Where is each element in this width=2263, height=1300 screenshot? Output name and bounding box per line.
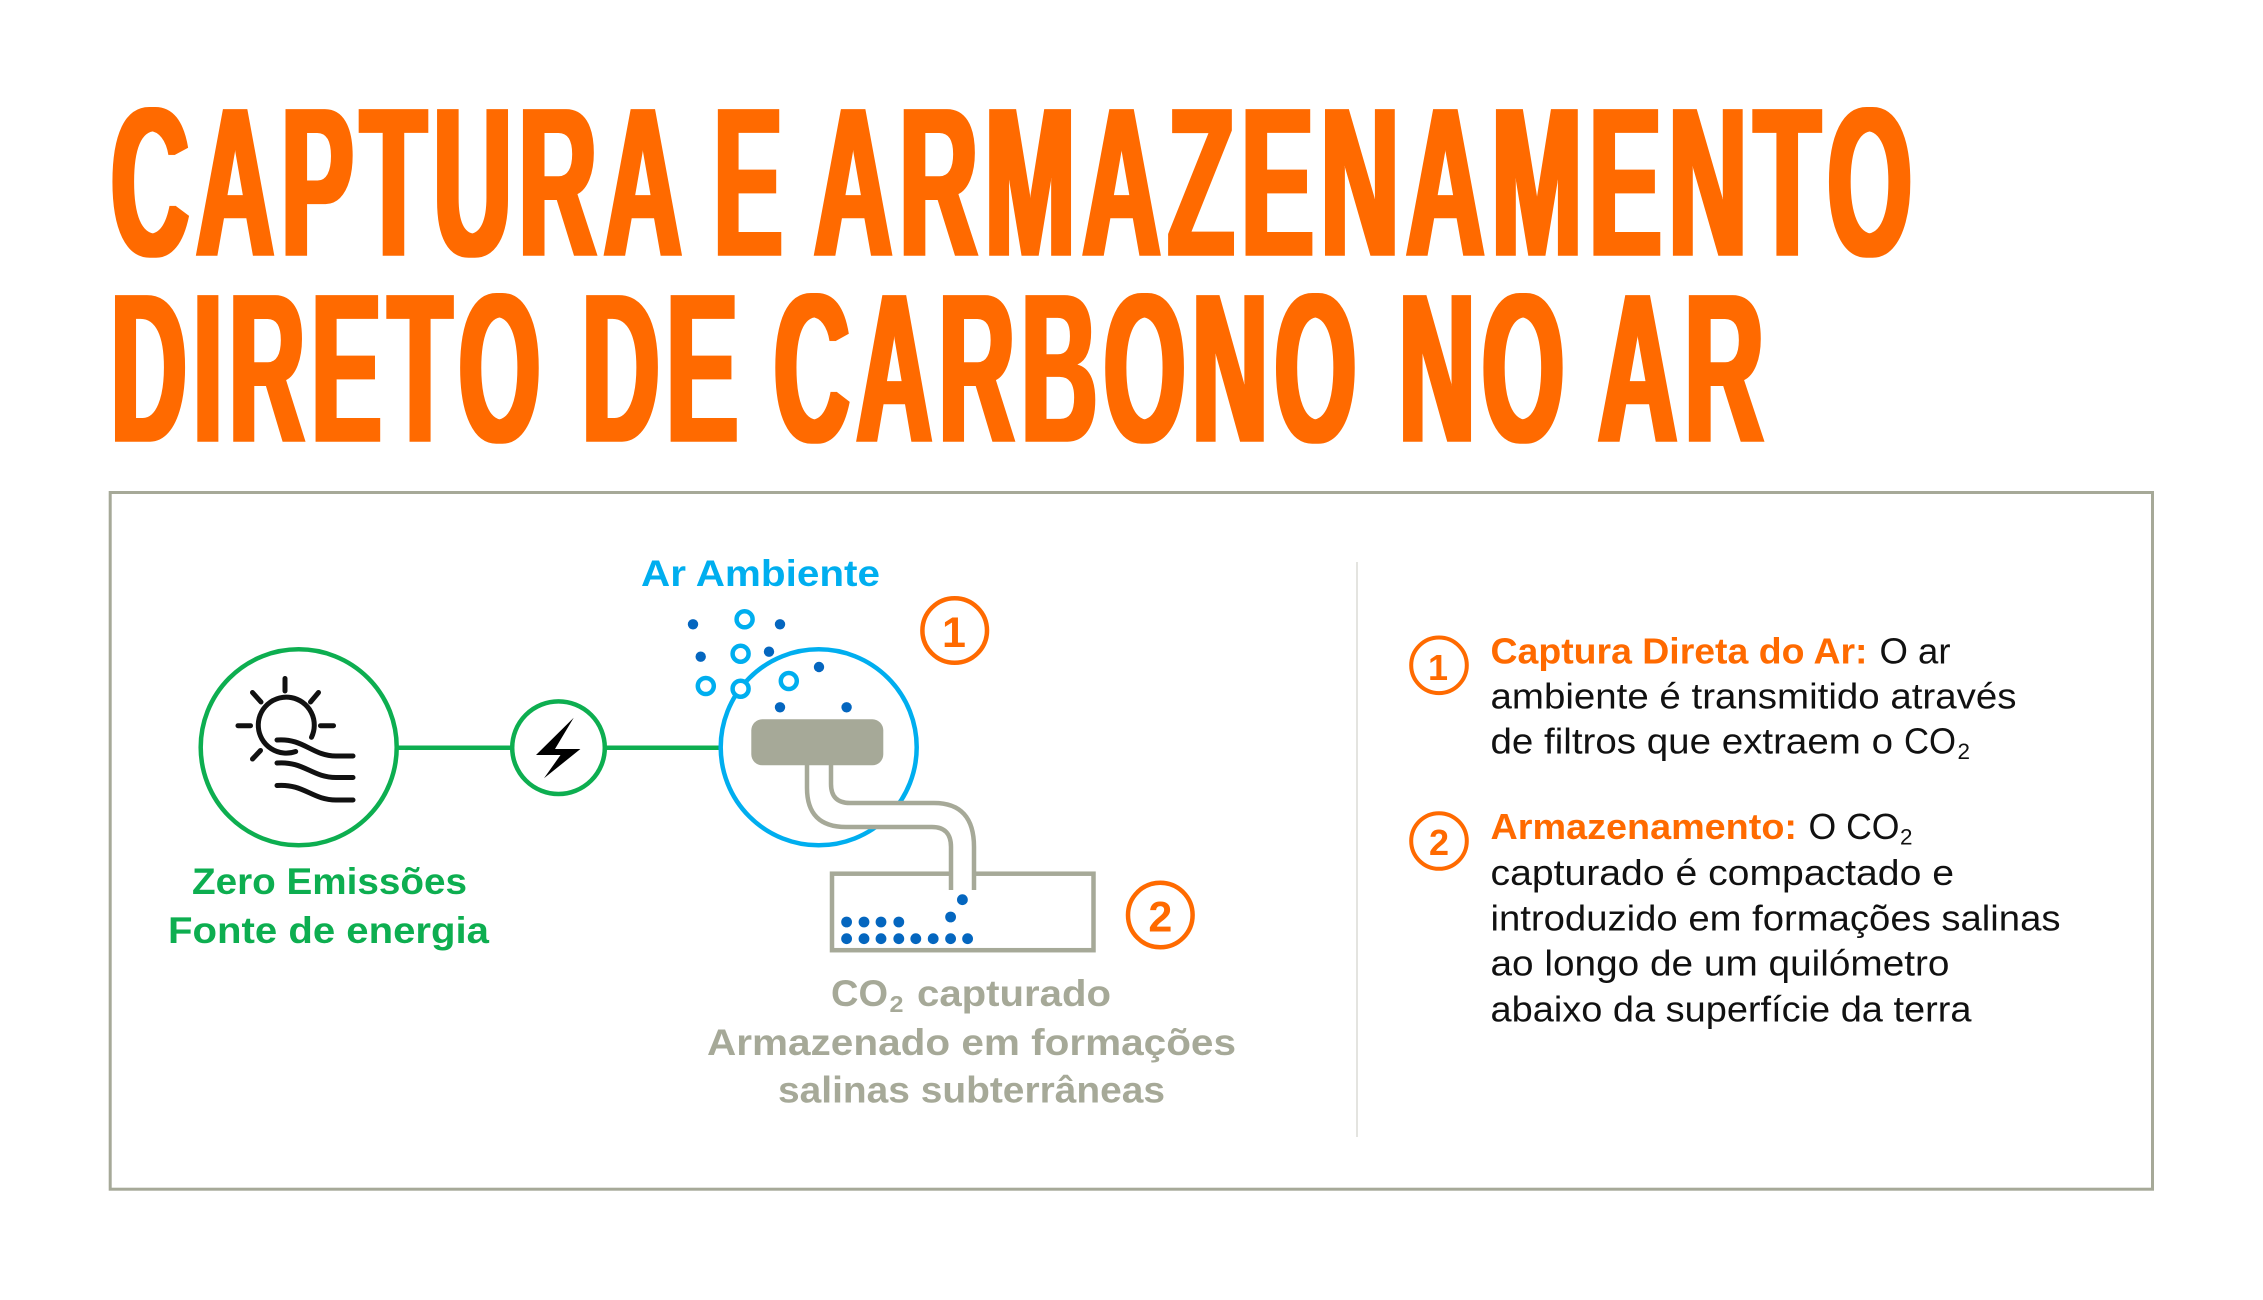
label: captured CO2 stored in saline formations: Armazenado em formações bbox=[707, 1022, 1236, 1063]
badge: step 2 legend: 2 bbox=[1429, 822, 1449, 863]
step 2 text block: abaixo da superfície da terra bbox=[1490, 988, 1973, 1030]
capture unit circle with filter and pipe bbox=[721, 649, 974, 890]
title bbox=[111, 64, 1919, 488]
step 1 text block bbox=[1411, 630, 2016, 764]
label: captured CO2 stored in saline formations bbox=[707, 973, 1236, 1111]
title: AR bbox=[1598, 250, 1771, 488]
air rings bbox=[698, 611, 797, 697]
label: zero emissions energy source: Fonte de energia bbox=[168, 910, 489, 951]
badge: step 1 diagram bbox=[922, 598, 987, 663]
step 1 text block: ambiente é transmitido através bbox=[1490, 676, 2016, 716]
label: zero emissions energy source bbox=[168, 861, 489, 951]
badge: step 2 diagram bbox=[1128, 883, 1193, 947]
divider bbox=[1356, 562, 1358, 1137]
step 2 text block: capturado é compactado e bbox=[1490, 852, 1954, 893]
title: DE bbox=[582, 250, 745, 488]
CO2 molecules: air dots bbox=[688, 619, 852, 712]
icon: lightning bolt bbox=[512, 701, 605, 794]
label: captured CO2 stored in saline formations: CO bbox=[831, 973, 888, 1014]
title: E bbox=[714, 64, 789, 302]
badge: step 1 legend: 1 bbox=[1428, 647, 1448, 688]
connector: green power line bbox=[398, 745, 720, 750]
title: DIRETO bbox=[111, 250, 547, 488]
title: CAPTURA bbox=[111, 64, 689, 302]
step 1 text block: Captura Direta do Ar: bbox=[1490, 630, 1868, 672]
badge: step 2 diagram: 2 bbox=[1148, 894, 1172, 942]
step 2 text block: ao longo de um quilómetro bbox=[1490, 943, 1950, 984]
step 2 text block: 2 bbox=[1900, 824, 1912, 850]
panel: diagram frame bbox=[110, 492, 2153, 1189]
badge: step 1 legend bbox=[1411, 638, 1467, 693]
step 2 text block bbox=[1411, 806, 2060, 1030]
step 1 text block: CO bbox=[1904, 720, 1956, 762]
icon: zero-emission energy source bbox=[201, 649, 397, 845]
storage box bbox=[832, 874, 1094, 950]
label: zero emissions energy source: Zero Emissões bbox=[192, 861, 467, 902]
badge: step 2 legend bbox=[1411, 813, 1467, 869]
title: CARBONO bbox=[774, 250, 1363, 488]
label: captured CO2 stored in saline formations: salinas subterrâneas bbox=[778, 1070, 1165, 1111]
step 2 text block: introduzido em formações salinas bbox=[1490, 898, 2060, 938]
step 2 text block: Armazenamento: bbox=[1490, 806, 1797, 847]
step 1 text block: de filtros que extraem o bbox=[1490, 720, 1893, 762]
label: captured CO2 stored in saline formations: 2 bbox=[890, 991, 904, 1017]
label: captured CO2 stored in saline formations: capturado bbox=[917, 973, 1111, 1014]
stored CO2 dots bbox=[841, 894, 973, 944]
title: NO bbox=[1399, 250, 1571, 488]
step 1 text block: O ar bbox=[1880, 630, 1951, 672]
step 2 text block: O CO bbox=[1808, 806, 1900, 847]
label: ambient air: Ar Ambiente bbox=[641, 553, 880, 594]
badge: step 1 diagram: 1 bbox=[942, 609, 966, 657]
step 1 text block: 2 bbox=[1958, 739, 1970, 764]
